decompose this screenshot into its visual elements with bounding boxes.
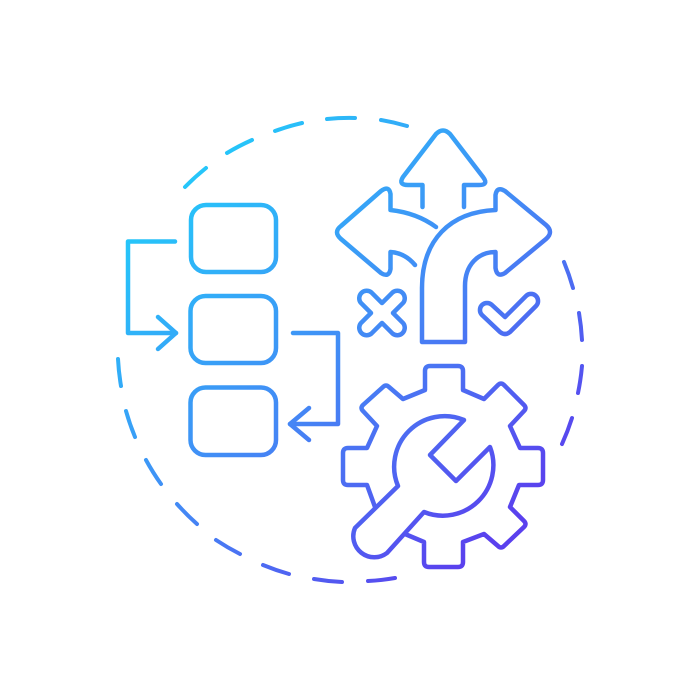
icon: cross mark — [359, 291, 405, 335]
arrow: right, highlighted path — [422, 189, 550, 342]
arrow: top box to middle box — [128, 242, 176, 349]
icon: three-way direction arrows — [337, 130, 550, 342]
dashed circle — [118, 118, 582, 582]
arrow: left — [337, 189, 436, 275]
icon: gear with wrench — [343, 366, 543, 567]
flowchart box: bottom — [190, 388, 276, 455]
gear outline — [343, 366, 543, 567]
wrench outline — [353, 416, 493, 557]
flowchart box: middle — [190, 296, 276, 363]
icon: check mark — [480, 294, 538, 334]
flowchart box: top — [191, 205, 276, 272]
arrow: up — [401, 130, 485, 207]
arrow: middle box to bottom box — [290, 333, 338, 440]
